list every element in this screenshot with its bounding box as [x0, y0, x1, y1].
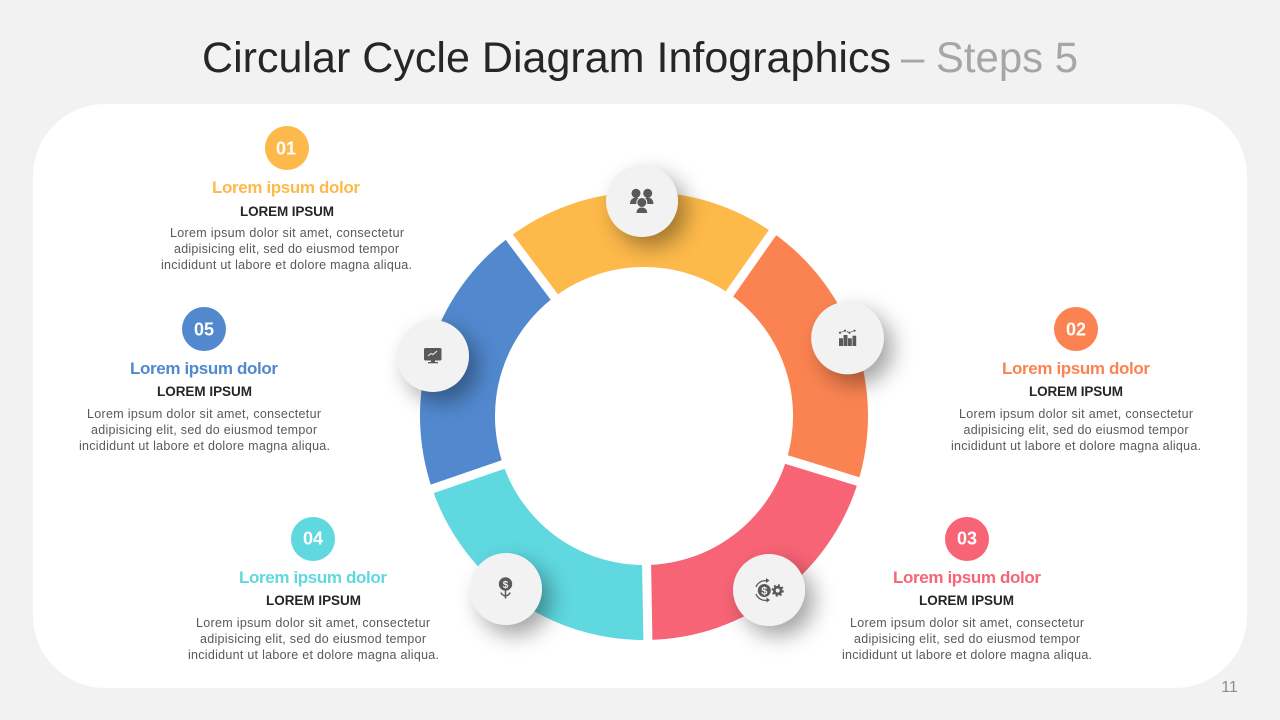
body 02: adipisicing elit, sed do eiusmod tempor: [964, 423, 1188, 437]
body 03: incididunt ut labore et dolore magna aliqua.: [842, 648, 1092, 662]
icon: money plant badge: [470, 553, 542, 625]
number badge 03: 03: [957, 528, 977, 548]
icon: dollar gear badge: [733, 554, 805, 626]
icon: money plant badge: $: [503, 580, 509, 591]
body 01: Lorem ipsum dolor sit amet, consectetur: [170, 226, 404, 240]
heading 01: Lorem ipsum dolor: [212, 178, 360, 197]
body 05: incididunt ut labore et dolore magna aliqua.: [79, 439, 330, 453]
page number: 11: [1221, 679, 1238, 696]
step 05: [79, 307, 330, 453]
body 04: Lorem ipsum dolor sit amet, consectetur: [196, 616, 430, 630]
body 01: adipisicing elit, sed do eiusmod tempor: [174, 242, 399, 256]
subheading 03: LOREM IPSUM: [919, 593, 1014, 608]
chart: circular cycle ring: [420, 192, 868, 645]
heading 02: Lorem ipsum dolor: [1002, 359, 1150, 378]
body 04: [188, 616, 439, 662]
subheading 02: LOREM IPSUM: [1029, 384, 1123, 399]
body 05: [79, 407, 330, 453]
panel: white background: [33, 104, 1247, 688]
number badge 02: 02: [1066, 320, 1086, 340]
body 04: adipisicing elit, sed do eiusmod tempor: [200, 632, 426, 646]
number badge 04: 04: [303, 528, 323, 548]
number badge 02: [1054, 307, 1098, 351]
number badge 04: [291, 517, 335, 561]
body 03: Lorem ipsum dolor sit amet, consectetur: [850, 616, 1084, 630]
body 01: incididunt ut labore et dolore magna aliqua.: [161, 258, 412, 272]
subheading 04: LOREM IPSUM: [266, 593, 361, 608]
icon: monitor badge: [397, 320, 469, 392]
segment 5 blue: [420, 237, 554, 489]
heading 04: Lorem ipsum dolor: [239, 568, 387, 587]
body 01: [161, 226, 412, 272]
body 02: incididunt ut labore et dolore magna aliqua.: [951, 439, 1201, 453]
number badge 03: [945, 517, 989, 561]
body 05: Lorem ipsum dolor sit amet, consectetur: [87, 407, 321, 421]
number badge 01: [265, 126, 309, 170]
body 03: adipisicing elit, sed do eiusmod tempor: [854, 632, 1080, 646]
subheading 01: LOREM IPSUM: [240, 204, 334, 219]
title: – Steps 5: [901, 34, 1078, 82]
segment 1 yellow: [509, 192, 772, 297]
body 04: incididunt ut labore et dolore magna aliqua.: [188, 648, 439, 662]
icon: people badge: [606, 165, 678, 237]
title: Circular Cycle Diagram Infographics: [202, 34, 891, 82]
step 03: [842, 517, 1092, 662]
icon: bar chart badge: [811, 302, 884, 374]
step 02: [951, 307, 1201, 453]
body 02: Lorem ipsum dolor sit amet, consectetur: [959, 407, 1193, 421]
body 03: [842, 616, 1092, 662]
icon: dollar gear badge: $: [761, 586, 767, 598]
subheading 05: LOREM IPSUM: [157, 384, 252, 399]
step 01: [161, 126, 412, 272]
heading 05: Lorem ipsum dolor: [130, 359, 278, 378]
step 04: [188, 517, 439, 662]
body 02: [951, 407, 1201, 453]
segment 3 red: [647, 460, 858, 640]
number badge 01: 01: [276, 138, 296, 158]
segment 2 orange: [730, 232, 868, 482]
segment 4 teal: [432, 464, 648, 640]
heading 03: Lorem ipsum dolor: [893, 568, 1041, 587]
number badge 05: 05: [194, 320, 214, 340]
body 05: adipisicing elit, sed do eiusmod tempor: [91, 423, 317, 437]
number badge 05: [182, 307, 226, 351]
